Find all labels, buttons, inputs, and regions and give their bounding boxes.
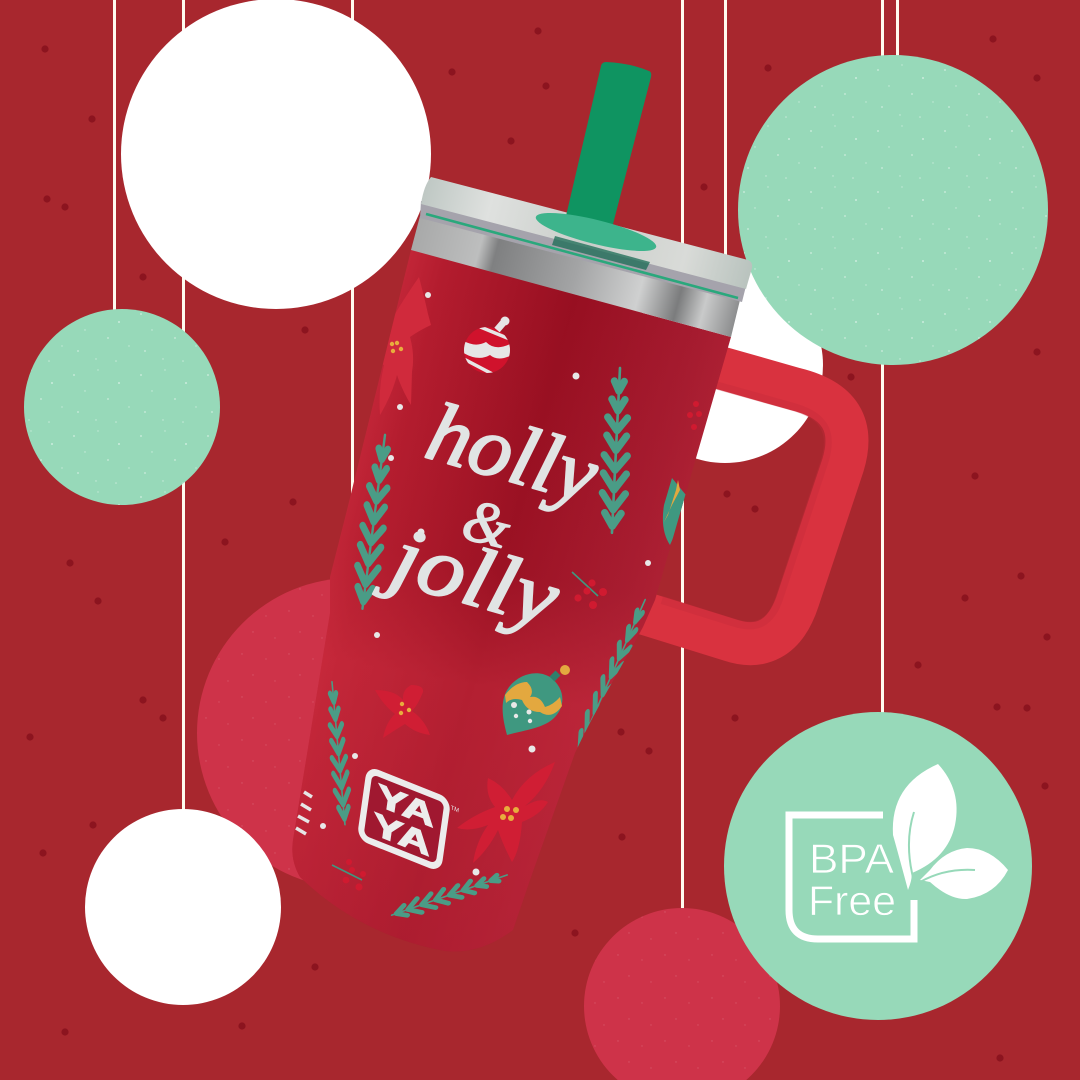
- brand logo YAYA: YA: [375, 777, 437, 834]
- lid seal: [420, 201, 746, 302]
- ornament: mint circle left: [24, 309, 220, 505]
- script text: jolly: jolly: [372, 507, 570, 646]
- ornament decal partial right: [662, 478, 686, 545]
- lid shadow through clear plastic: [552, 236, 650, 270]
- ornament: white circle bottom left: [85, 809, 281, 1005]
- tumbler body: [292, 250, 731, 952]
- body decorations: [296, 277, 702, 922]
- BPA free badge: [724, 712, 1032, 1020]
- white snow dots: [320, 292, 651, 876]
- tumbler product: [292, 62, 847, 952]
- berries right: [687, 401, 702, 430]
- clear lid: [421, 177, 752, 289]
- script text: holly: holly: [417, 385, 609, 522]
- brand logo YAYA: YA: [371, 806, 433, 863]
- sprig bottom: [390, 872, 508, 918]
- small leaf icon: [920, 848, 1008, 899]
- ornament: large mint circle top right: [738, 55, 1048, 365]
- brand logo YAYA: [360, 770, 460, 873]
- Free text: Free: [808, 877, 896, 924]
- ornament: pink circle bottom: [584, 908, 780, 1080]
- sprig left: [354, 434, 391, 610]
- metal rim: [411, 216, 740, 337]
- poinsettia middle: [375, 685, 430, 738]
- ornament decal red and white: [464, 316, 510, 373]
- sprig lower right: [578, 598, 646, 748]
- partial white ornament left edge: [296, 792, 312, 834]
- green seal line: [426, 214, 738, 298]
- ornament: large white circle top: [121, 0, 431, 309]
- poinsettia top: [380, 278, 431, 414]
- hanging strings: [113, 0, 899, 920]
- BPA text: BPA: [809, 835, 894, 882]
- brand logo YAYA: TM: [450, 805, 459, 814]
- straw base flange: [533, 205, 659, 259]
- berries bottom: [332, 859, 366, 891]
- berries: [572, 572, 607, 609]
- sprig lower left: [328, 680, 351, 826]
- body lower shading: [292, 250, 731, 952]
- label bracket: [789, 815, 914, 939]
- large leaf icon: [893, 764, 957, 890]
- script text: ampersand: &: [456, 486, 518, 561]
- poinsettia large: [457, 762, 555, 863]
- straw: [566, 62, 651, 228]
- ornament decal green and gold: [503, 665, 570, 735]
- badge circle: [724, 712, 1032, 1020]
- handle: [640, 362, 847, 644]
- ornament: white circle behind tumbler: [627, 267, 823, 463]
- ornament: large pink circle behind tumbler: [197, 578, 507, 888]
- sprig upper right: [600, 367, 632, 533]
